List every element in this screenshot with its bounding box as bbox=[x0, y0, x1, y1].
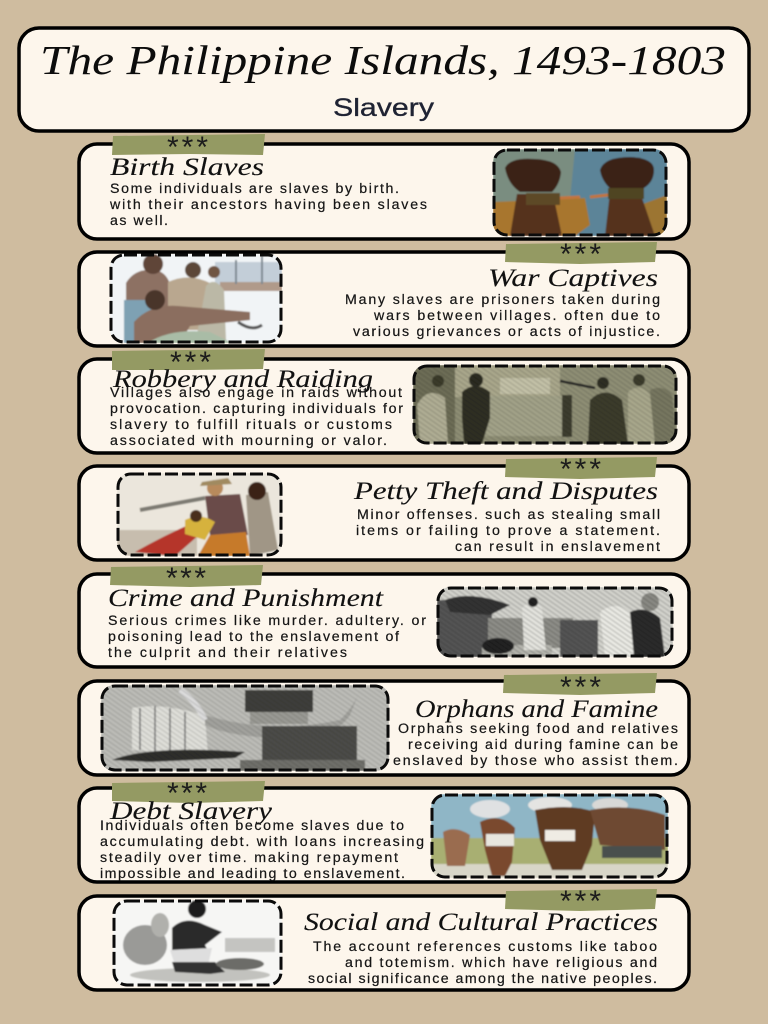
body text bbox=[100, 818, 424, 882]
tape with stars bbox=[505, 238, 657, 271]
title: The Philippine Islands, 1493-1803 bbox=[40, 37, 726, 83]
heading: War Captives bbox=[488, 265, 658, 292]
tape with stars bbox=[110, 562, 263, 595]
tape with stars bbox=[503, 671, 657, 704]
panel: Petty Theft and Disputes bbox=[79, 453, 689, 560]
heading: Birth Slaves bbox=[110, 154, 264, 181]
tape with stars bbox=[505, 453, 657, 486]
body text bbox=[109, 181, 427, 229]
image: kneeling figure in chains bbox=[113, 900, 282, 986]
panel: Birth Slaves bbox=[79, 131, 689, 239]
image: porters carrying loads bbox=[431, 794, 668, 878]
tape with stars bbox=[112, 777, 265, 810]
heading: Social and Cultural Practices bbox=[304, 909, 658, 936]
body text: slavery to fulfill rituals or customs bbox=[110, 417, 392, 433]
image: armed men in a room bbox=[413, 365, 677, 444]
panel: Debt Slavery bbox=[79, 777, 689, 882]
tape with stars bbox=[112, 346, 265, 379]
image: raised chained fists bbox=[493, 149, 667, 236]
body text bbox=[356, 507, 660, 555]
body text: impossible and leading to enslavement. bbox=[100, 866, 405, 882]
heading: Petty Theft and Disputes bbox=[353, 478, 658, 505]
body text: associated with mourning or valor. bbox=[110, 433, 387, 449]
heading: Debt Slavery bbox=[109, 798, 273, 825]
panel: Crime and Punishment bbox=[79, 562, 689, 667]
tape with stars: *** bbox=[560, 671, 601, 704]
tape with stars: *** bbox=[170, 346, 211, 379]
body text bbox=[393, 721, 678, 769]
tape with stars bbox=[505, 885, 657, 918]
panel: War Captives bbox=[79, 238, 689, 346]
body text: social significance among the native peoples. bbox=[308, 971, 657, 987]
body text: Many slaves are prisoners taken during bbox=[345, 292, 660, 308]
body text: and totemism. which have religious and bbox=[345, 955, 657, 971]
heading: Orphans and Famine bbox=[415, 696, 658, 723]
heading: Crime and Punishment bbox=[108, 585, 384, 612]
tape with stars bbox=[112, 131, 265, 164]
image: slave auction engraving bbox=[437, 587, 673, 657]
body text: various grievances or acts of injustice. bbox=[353, 324, 660, 340]
image: captives in chains bbox=[110, 254, 282, 343]
body text: Some individuals are slaves by birth. bbox=[110, 181, 399, 197]
panel: Robbery and Raiding bbox=[79, 346, 689, 453]
body text: as well. bbox=[110, 213, 168, 229]
body text: can result in enslavement bbox=[455, 539, 660, 555]
body text: receiving aid during famine can be bbox=[408, 737, 678, 753]
body text: with their ancestors having been slaves bbox=[109, 197, 427, 213]
body text bbox=[108, 613, 426, 661]
body text: Villages also engage in raids without bbox=[110, 385, 402, 401]
subtitle: Slavery bbox=[333, 94, 435, 122]
body text: steadily over time. making repayment bbox=[100, 850, 398, 866]
tape with stars: *** bbox=[560, 238, 601, 271]
body text: provocation. capturing individuals for bbox=[110, 401, 403, 417]
body text: items or failing to prove a statement. bbox=[356, 523, 660, 539]
tape with stars: *** bbox=[166, 562, 206, 595]
panel: title bbox=[19, 28, 749, 131]
heading: Robbery and Raiding bbox=[112, 366, 373, 393]
body text: enslaved by those who assist them. bbox=[393, 753, 678, 769]
body text: accumulating debt. with loans increasing bbox=[100, 834, 424, 850]
panel: Social and Cultural Practices bbox=[79, 885, 689, 990]
tape with stars: *** bbox=[560, 453, 601, 486]
body text: Serious crimes like murder. adultery. or bbox=[108, 613, 426, 629]
body text bbox=[345, 292, 660, 340]
body text: poisoning lead to the enslavement of bbox=[108, 629, 399, 645]
tape with stars: *** bbox=[167, 131, 208, 164]
body text: Orphans seeking food and relatives bbox=[398, 721, 678, 737]
image: overseer with whip bbox=[117, 473, 282, 556]
tape with stars: *** bbox=[167, 777, 207, 810]
body text: the culprit and their relatives bbox=[108, 645, 347, 661]
panel: Orphans and Famine bbox=[79, 671, 689, 775]
tape with stars: *** bbox=[560, 885, 601, 918]
image: outrigger ship engraving bbox=[101, 685, 389, 771]
body text: Individuals often become slaves due to bbox=[100, 818, 404, 834]
body text bbox=[308, 939, 657, 987]
body text bbox=[110, 385, 403, 449]
body text: wars between villages. often due to bbox=[373, 308, 660, 324]
body text: Minor offenses. such as stealing small bbox=[357, 507, 660, 523]
body text: The account references customs like taboo bbox=[313, 939, 657, 955]
